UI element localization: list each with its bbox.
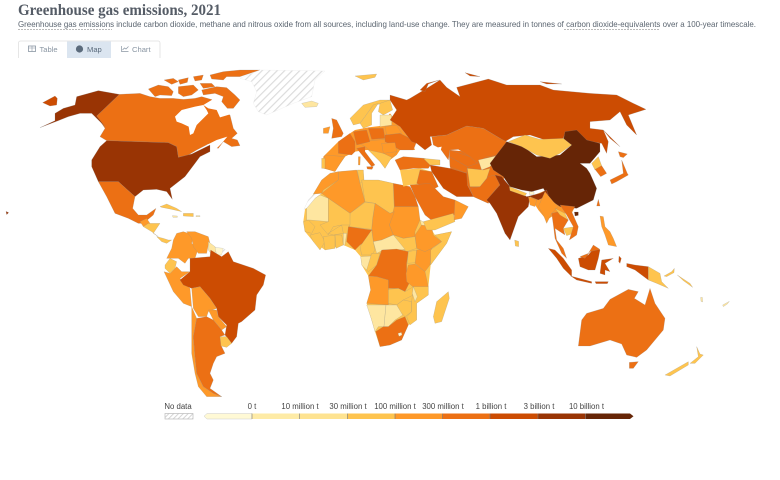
Arctic islands <box>465 73 480 77</box>
United States <box>92 141 210 199</box>
tab: chart <box>122 45 151 54</box>
Morocco <box>313 172 338 194</box>
Chukotka <box>43 96 57 106</box>
Hainan <box>574 212 578 216</box>
South Korea <box>595 166 607 177</box>
Yemen <box>423 213 455 230</box>
Western Sahara: no data <box>304 193 322 209</box>
Arctic Canada islands <box>148 70 260 108</box>
Cameroon <box>360 230 375 255</box>
Libya <box>362 180 394 213</box>
Japan <box>610 160 628 184</box>
Africa landmass <box>303 170 452 347</box>
Portugal <box>322 158 325 168</box>
Nigeria <box>347 227 372 250</box>
Ireland <box>323 127 330 133</box>
New Britain <box>664 268 674 277</box>
Thailand <box>552 212 568 258</box>
Lesser Sunda Islands <box>595 282 608 284</box>
Hawaii <box>6 211 9 215</box>
tab: chart: Chart <box>132 45 151 54</box>
Pakistan <box>470 175 500 203</box>
Papua New Guinea <box>648 267 668 288</box>
Cuba <box>160 204 182 212</box>
Kyrgyzstan and Tajikistan <box>478 155 500 170</box>
Colombia <box>167 232 198 263</box>
Sulawesi <box>600 258 613 275</box>
Norway <box>350 100 390 125</box>
Bolivia <box>192 287 217 317</box>
Oceania <box>515 240 729 376</box>
Angola <box>367 276 390 305</box>
Central Asia landmass <box>450 150 505 203</box>
Benin <box>343 233 347 245</box>
Philippines <box>600 216 617 247</box>
Europe <box>322 100 432 172</box>
Tasmania <box>629 362 638 368</box>
legend labels: 10 million t <box>281 402 319 411</box>
Germany <box>353 130 370 145</box>
Finland <box>378 100 393 115</box>
Ethiopia <box>415 225 442 252</box>
Bhutan <box>529 192 534 194</box>
Cambodia <box>563 227 575 236</box>
legend labels: 100 million t <box>374 402 417 411</box>
Kenya <box>415 248 432 272</box>
Poland <box>368 128 385 139</box>
Vietnam <box>560 205 578 240</box>
Venezuela <box>187 232 210 253</box>
Sri Lanka <box>515 240 519 247</box>
Somalia <box>431 232 452 265</box>
Laos <box>555 208 568 220</box>
Paraguay <box>208 310 227 330</box>
legend labels: 1 billion t <box>476 402 507 411</box>
Ivory Coast <box>323 235 335 250</box>
Caspian Sea <box>433 147 451 168</box>
Europe landmass <box>323 113 415 172</box>
legend labels: 3 billion t <box>524 402 555 411</box>
Madagascar <box>433 292 449 323</box>
Bangladesh <box>528 197 537 207</box>
Sweden <box>360 103 378 128</box>
Moluccas <box>619 256 621 263</box>
Mexico <box>98 182 156 223</box>
Guatemala and Belize <box>140 218 150 227</box>
Sardinia <box>358 157 360 165</box>
legend: colour scale <box>204 402 634 419</box>
Western New Guinea <box>627 263 648 280</box>
Ghana <box>335 235 343 248</box>
Niger <box>349 202 375 229</box>
Chad <box>372 203 394 242</box>
Borneo: Malaysia <box>580 245 600 258</box>
Solomon Islands <box>677 275 693 287</box>
tabs: table, map, chart <box>18 41 160 58</box>
Sakhalin <box>603 130 620 147</box>
legend labels <box>248 402 605 411</box>
Turkey <box>395 157 432 170</box>
Turkmenistan <box>449 157 467 173</box>
South Africa <box>376 317 408 347</box>
Romania <box>382 143 397 153</box>
France <box>338 133 355 155</box>
Sumatra <box>548 248 572 277</box>
Chile <box>192 307 222 397</box>
Congo <box>367 253 380 272</box>
Alaska <box>40 91 119 128</box>
Tanzania <box>406 264 428 290</box>
tab: map: Map <box>87 45 102 54</box>
Zimbabwe <box>397 300 412 317</box>
Myanmar <box>538 192 558 223</box>
Central African Republic <box>373 235 405 253</box>
Uganda <box>407 250 417 263</box>
tab: map <box>76 45 102 54</box>
Ecuador <box>165 258 177 273</box>
legend labels: 10 billion t <box>569 402 605 411</box>
Guinea and Sierra Leone <box>310 233 325 250</box>
Mali <box>320 198 350 235</box>
India <box>487 175 548 240</box>
legend: no data <box>164 402 193 419</box>
Nepal <box>509 187 527 196</box>
United Kingdom <box>332 118 343 138</box>
Balkans <box>368 150 392 168</box>
Levant landmass <box>400 168 438 187</box>
Southeast Asia <box>538 192 668 288</box>
Honduras and Nicaragua <box>143 223 160 237</box>
Svalbard <box>355 74 377 80</box>
Central Europe <box>357 139 397 160</box>
Algeria <box>322 170 365 213</box>
Novaya Zemlya <box>420 80 439 92</box>
Caucasus <box>423 158 440 165</box>
Jamaica <box>172 216 177 217</box>
Iraq <box>417 170 438 190</box>
South America <box>164 250 266 397</box>
South Sudan <box>393 235 417 252</box>
Tunisia <box>357 170 364 183</box>
Egypt <box>393 183 418 207</box>
Puerto Rico <box>196 215 200 218</box>
tab: table <box>28 45 58 54</box>
Canada <box>97 93 240 157</box>
Uzbekistan <box>449 150 477 167</box>
tab: table: Table <box>40 45 58 54</box>
French Guiana: no data <box>222 248 228 256</box>
Taiwan <box>597 199 600 206</box>
Belarus <box>385 125 402 135</box>
Oman <box>454 200 468 220</box>
Senegal <box>303 220 315 233</box>
subtitle: Greenhouse gas emissions include carbon dioxide, methane and nitrous oxide from all sources, including land-use change. They are measured in tonnes of carbon dioxide-equivalents over a 100-year timescale. <box>18 19 756 29</box>
Sudan <box>389 207 420 238</box>
Argentina <box>193 317 225 397</box>
Mozambique <box>407 287 428 325</box>
legend labels: 0 t <box>248 402 257 411</box>
Baltic states <box>380 115 392 127</box>
Mauritania <box>307 195 328 222</box>
Burkina Faso <box>328 225 343 235</box>
Ukraine <box>385 133 417 150</box>
Russia and Asia <box>390 73 646 240</box>
legend labels: 300 million t <box>422 402 465 411</box>
Saudi Arabia <box>410 183 460 222</box>
North America <box>6 70 377 223</box>
DR Congo <box>368 249 410 292</box>
Greenland: no data <box>240 70 325 115</box>
Fiji <box>723 301 729 307</box>
Costa Rica and Panama <box>157 237 172 243</box>
Borneo: Kalimantan <box>578 247 600 270</box>
Vanuatu <box>701 297 703 302</box>
New Zealand <box>665 347 703 376</box>
North Korea <box>592 157 602 170</box>
Mongolia <box>508 135 572 158</box>
Australia <box>578 288 665 357</box>
Namibia <box>367 305 386 332</box>
Lesotho <box>398 332 402 336</box>
Iceland <box>302 101 318 107</box>
Peru <box>164 267 192 307</box>
Kazakhstan <box>432 126 507 163</box>
Malawi <box>412 287 417 302</box>
Zambia <box>388 287 413 305</box>
Eritrea <box>420 220 428 226</box>
Gabon <box>361 256 372 270</box>
Java <box>571 276 592 283</box>
title: Greenhouse gas emissions, 2021 <box>18 2 221 19</box>
Central America and Caribbean <box>140 204 228 263</box>
legend: no data: No data <box>164 402 192 411</box>
Uruguay <box>220 337 232 347</box>
Africa <box>303 170 452 347</box>
Italy <box>357 147 375 167</box>
Iran <box>430 165 473 197</box>
Russia <box>390 79 646 153</box>
Hispaniola <box>183 213 193 217</box>
Suriname <box>215 247 223 255</box>
China <box>490 130 600 208</box>
Spain <box>323 155 345 172</box>
Guyana <box>208 242 217 257</box>
Brazil <box>180 250 266 343</box>
Indochina landmass <box>530 190 575 220</box>
world map <box>6 70 729 397</box>
legend labels: 30 million t <box>329 402 367 411</box>
Afghanistan <box>467 168 490 187</box>
Botswana <box>384 305 403 327</box>
